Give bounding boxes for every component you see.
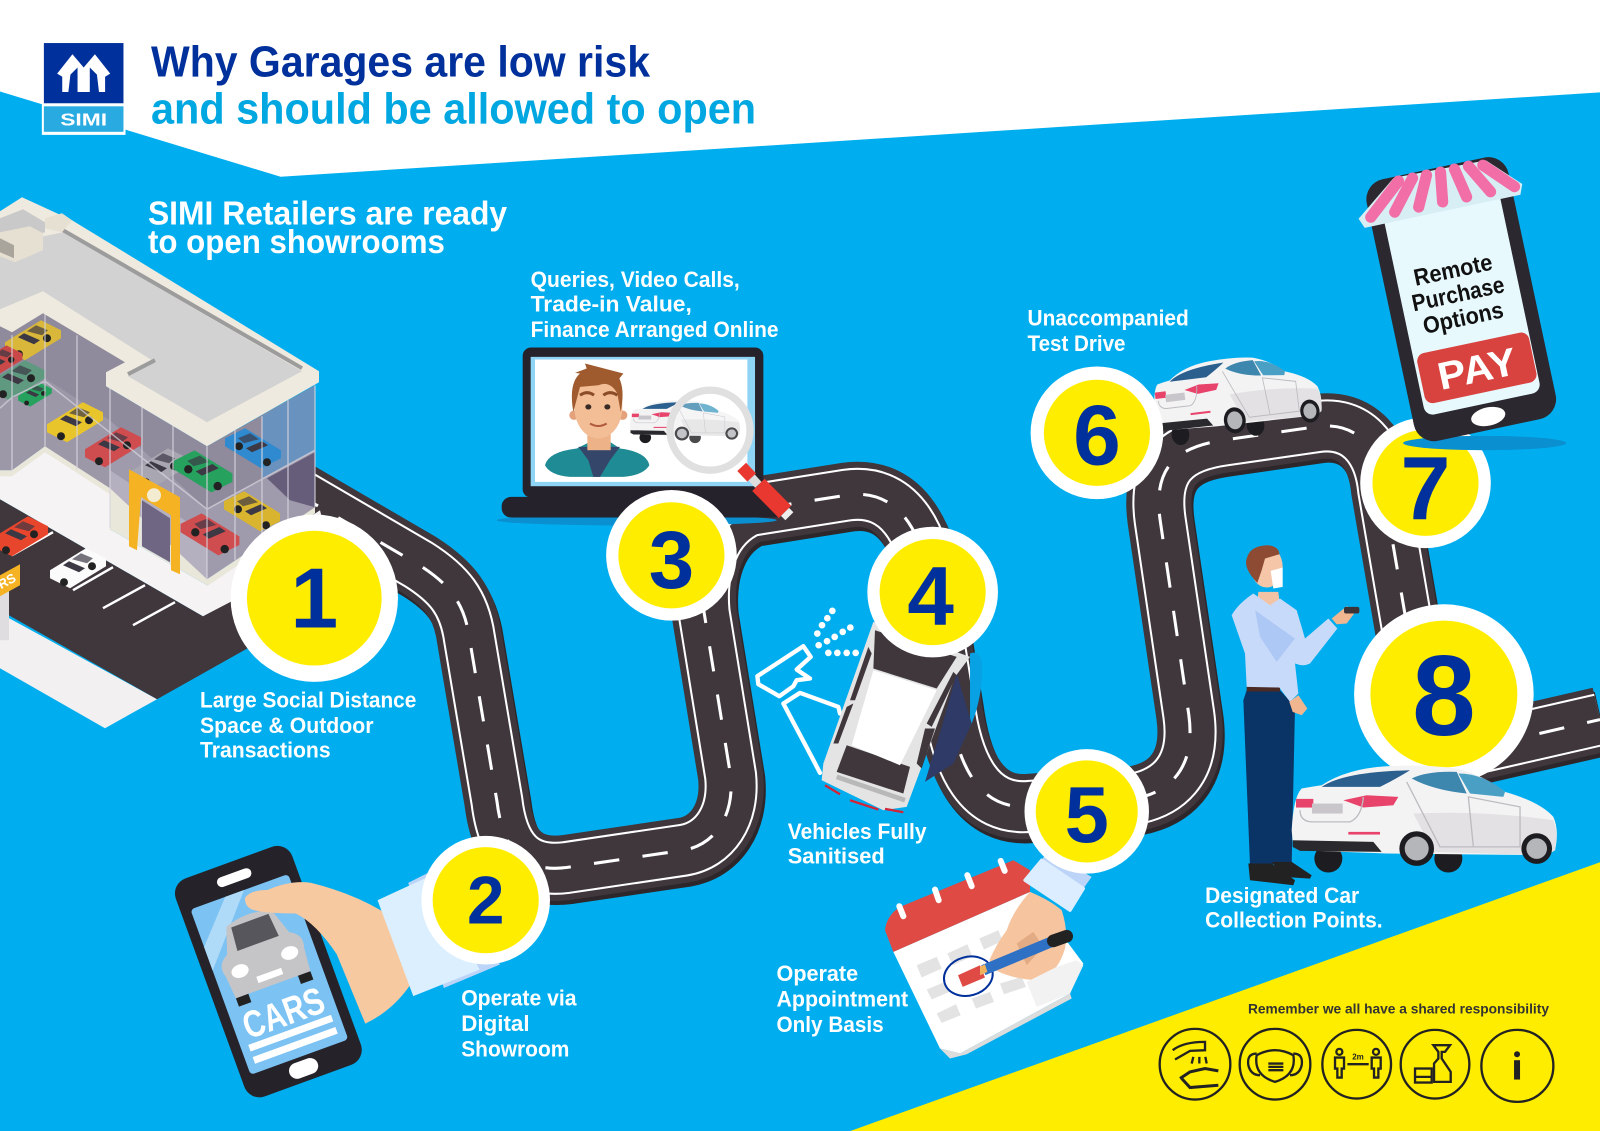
step marker 7 [1360, 418, 1491, 548]
entrance gate [129, 469, 180, 574]
label: step 2: Digital [461, 1011, 530, 1036]
calendar with hand [885, 852, 1092, 1059]
phone: remote purchase [1352, 151, 1571, 447]
step marker 2: 2 [467, 864, 504, 939]
label: step 5: Appointment [777, 986, 909, 1011]
label: step 2: Showroom [461, 1036, 569, 1061]
safety icons [1160, 1029, 1553, 1102]
step marker 6 [1031, 367, 1163, 499]
sleeve cuff [378, 868, 500, 996]
label: step 6: Unaccompanied [1028, 306, 1189, 331]
step marker 4: 4 [907, 549, 954, 643]
label: step 4: Sanitised [788, 843, 885, 868]
pay button [1416, 331, 1538, 405]
car on road: test drive [1149, 348, 1325, 448]
spray bottle [757, 646, 840, 773]
label: step 1: Large Social Distance [200, 687, 416, 712]
label: step 8 [1205, 883, 1383, 933]
label: step 2: Operate via [461, 985, 577, 1010]
roof [0, 197, 319, 446]
step marker 3 [606, 490, 737, 621]
label: step 5: Only Basis [777, 1012, 884, 1037]
label: step 1: Space & Outdoor [200, 713, 374, 738]
label: step 4 [788, 819, 927, 868]
forecourt [0, 446, 330, 616]
label: step 2 [461, 985, 577, 1061]
label: step 1 [200, 687, 416, 762]
step marker 1: 1 [290, 551, 338, 647]
phone shadow [1403, 436, 1566, 450]
label: step 4: Vehicles Fully [788, 819, 927, 844]
phone text: Options [1420, 297, 1506, 339]
icon: cleaning spray [1401, 1030, 1469, 1099]
winding road [296, 426, 1600, 872]
title [151, 38, 756, 134]
icon: face mask [1240, 1029, 1310, 1100]
icon: 2m distancing: 2m [1352, 1053, 1364, 1062]
icon: hand washing [1160, 1029, 1230, 1100]
sign post [0, 564, 20, 640]
building: showroom [0, 197, 330, 728]
label: step 6 [1028, 306, 1189, 356]
icon: 2m distancing [1322, 1030, 1391, 1099]
label: step 8: Collection Points. [1205, 908, 1383, 933]
glass walls [0, 292, 315, 586]
phone [170, 841, 366, 1102]
pavement strip [0, 613, 157, 728]
step marker 4 [867, 527, 998, 657]
subtitle [148, 196, 507, 261]
header: white banner [0, 0, 1600, 177]
step marker 6: 6 [1073, 387, 1121, 483]
label: step 3 [531, 267, 779, 342]
hand holding phone with CARS app [170, 841, 500, 1102]
hand [245, 882, 410, 1024]
magnifying glass [670, 390, 789, 516]
man with car keys [1232, 545, 1359, 885]
laptop [497, 348, 789, 526]
step marker 8: 8 [1412, 633, 1476, 760]
pen circle on date [958, 965, 985, 987]
pay button: PAY [1434, 340, 1521, 399]
phone text: Purchase [1409, 271, 1507, 316]
man on video call [545, 364, 649, 477]
logo: SIMI [42, 41, 126, 135]
car on screen [630, 400, 740, 443]
phone: CARS [237, 980, 330, 1048]
title: and should be allowed to open [151, 85, 756, 134]
footer note: Remember we all have a shared responsibility [1248, 1001, 1549, 1017]
label: step 8: Designated Car [1205, 883, 1359, 908]
label: step 3: Queries, Video Calls, [531, 267, 740, 292]
step marker 8 [1354, 604, 1534, 784]
collection car [1292, 766, 1557, 873]
phone text: Remote [1411, 249, 1495, 291]
step marker 5: 5 [1065, 770, 1109, 859]
label: step 3: Trade-in Value, [531, 291, 692, 316]
step marker 3: 3 [649, 515, 694, 606]
step marker 7: 7 [1401, 440, 1450, 540]
label: step 1: Transactions [200, 737, 331, 762]
phone text [1404, 247, 1512, 340]
title: Why Garages are low risk [151, 38, 651, 87]
cars in showroom [0, 320, 281, 588]
subtitle: SIMI Retailers are ready [148, 196, 507, 233]
step marker 5 [1024, 749, 1149, 874]
logo: SIMI: SIMI [60, 110, 107, 130]
label: step 5 [777, 961, 909, 1037]
shirt cuff [1025, 852, 1092, 910]
sanitised car from above [757, 608, 982, 812]
label: step 6: Test Drive [1028, 331, 1126, 356]
icon: information [1481, 1030, 1553, 1102]
label: step 3: Finance Arranged Online [531, 317, 779, 342]
footer: yellow corner panel [837, 860, 1600, 1131]
step marker 2 [421, 836, 550, 964]
step marker 1 [231, 514, 398, 682]
tarmac car park [0, 499, 262, 699]
subtitle: to open showrooms [148, 224, 445, 261]
label: step 5: Operate [777, 961, 858, 986]
